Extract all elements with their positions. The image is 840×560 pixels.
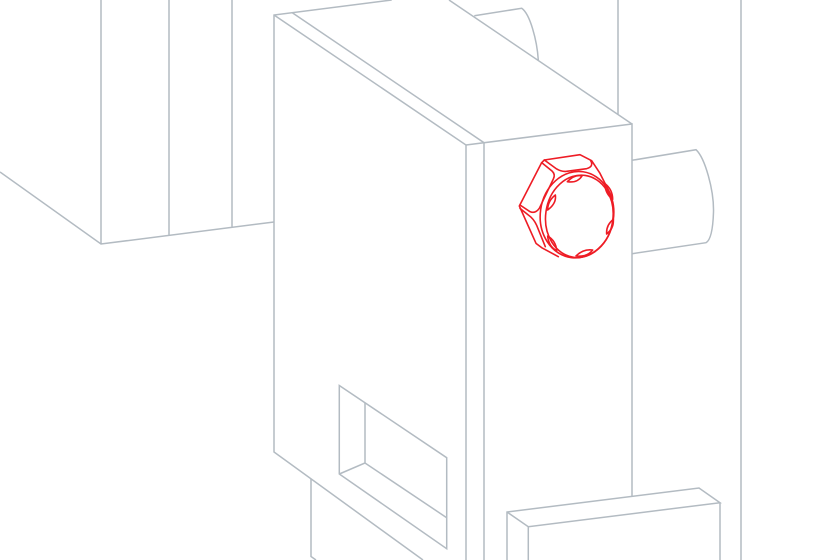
- nut outer ring: [535, 167, 619, 263]
- nut top facet: [544, 160, 592, 171]
- nut outer hexagon: [519, 155, 612, 257]
- nut left facet: [520, 163, 554, 212]
- lower block beneath the housing: [311, 479, 316, 560]
- left background block: [0, 0, 274, 244]
- nut notches: [548, 176, 613, 256]
- right cylinder: [632, 150, 714, 254]
- main housing: [274, 0, 632, 560]
- icon: red hex nut: [519, 155, 619, 263]
- nut inner ring: [540, 171, 618, 262]
- bottom right block: [507, 488, 720, 560]
- recessed slot: [339, 386, 447, 549]
- right background columns: [618, 0, 741, 560]
- upper cylinder behind the housing: [474, 8, 538, 60]
- nut lower left facet: [520, 208, 545, 247]
